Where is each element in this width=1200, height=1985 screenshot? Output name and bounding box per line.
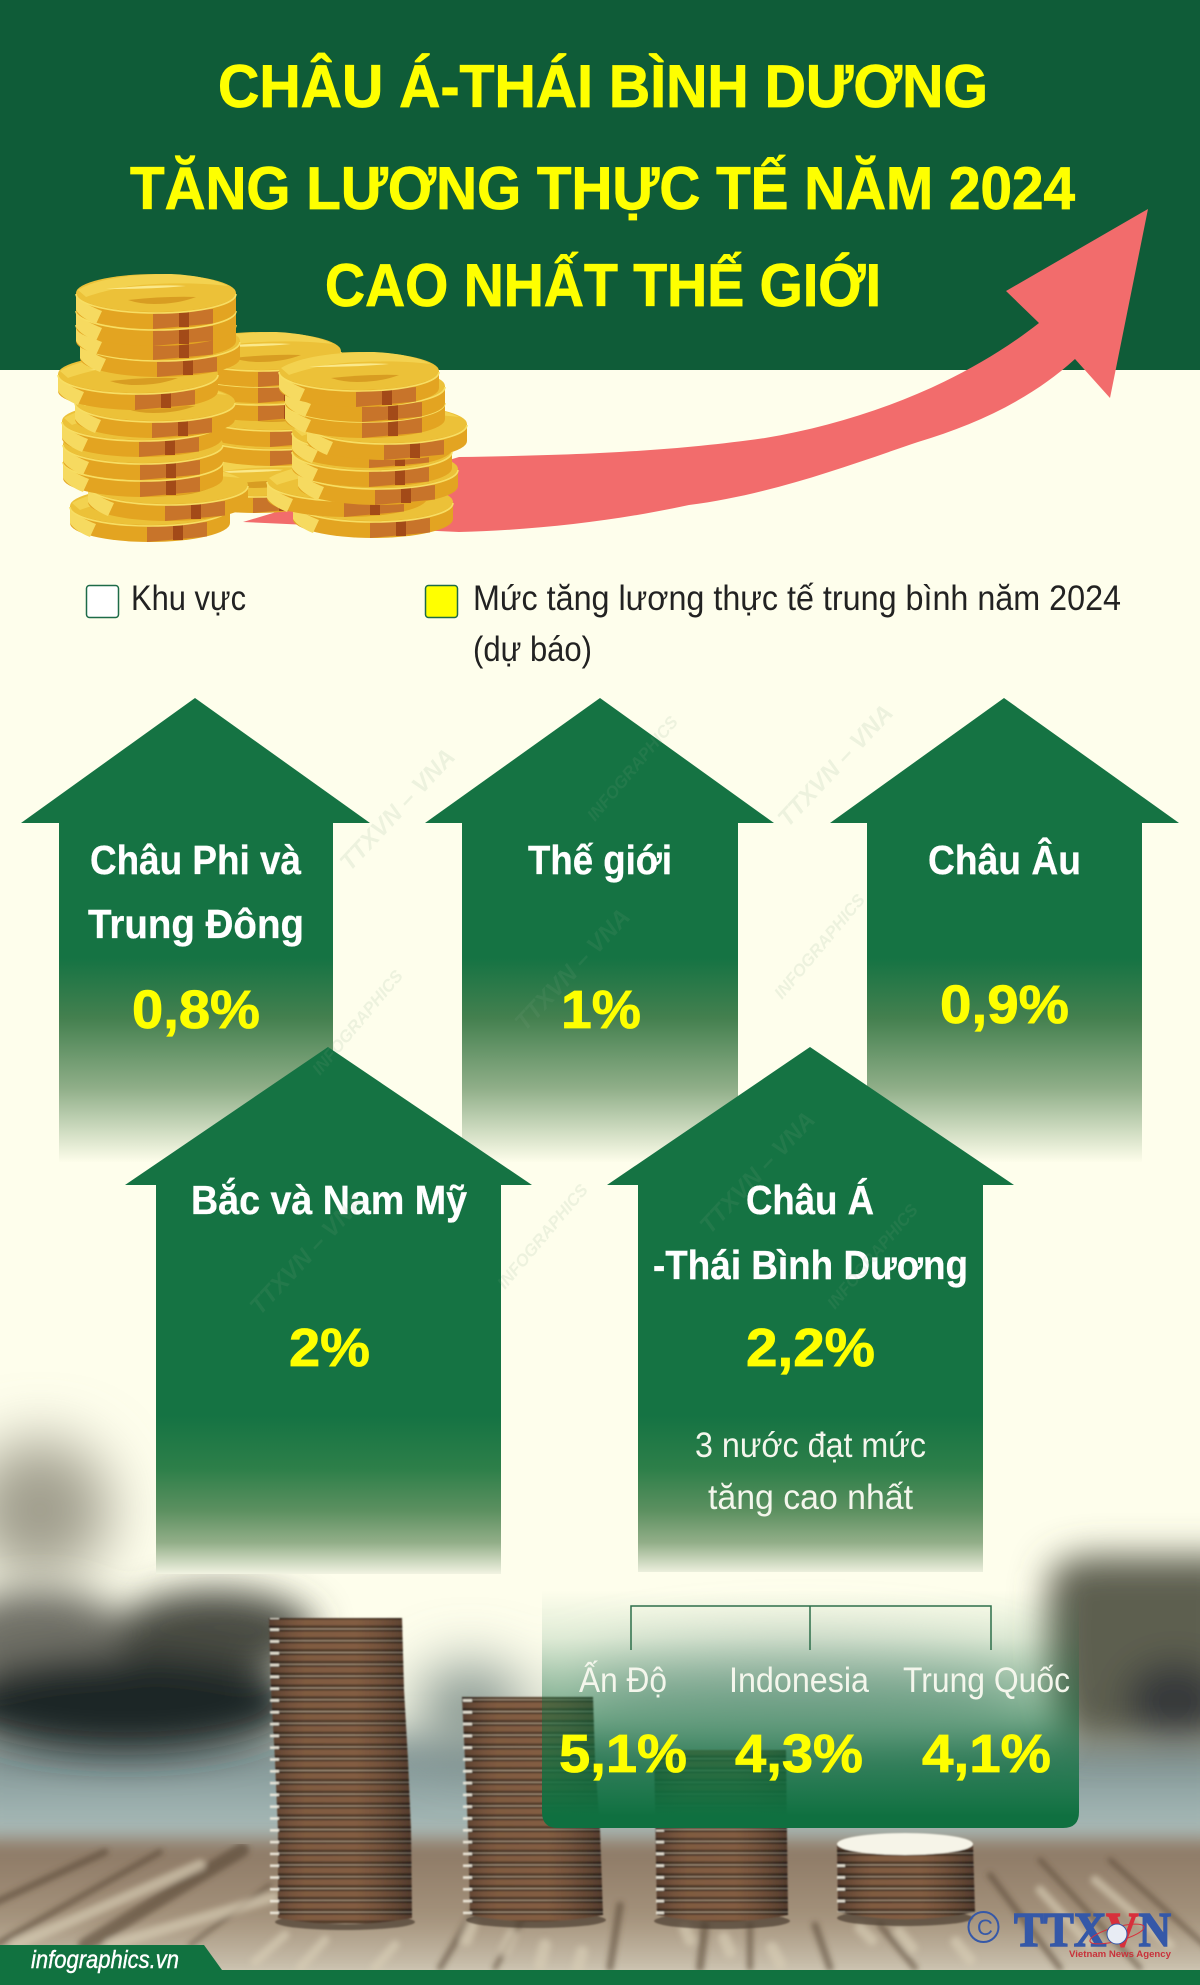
watermarks: TTXVN – VNA <box>245 1188 371 1320</box>
arrow: Châu Âu: Châu Âu <box>928 837 1081 883</box>
title <box>130 53 1076 319</box>
arrow: Châu Phi và Trung Đông: Trung Đông <box>88 901 304 947</box>
icon: gold coins stack <box>58 274 467 542</box>
country: Trung Quốc: 4,1% <box>922 1724 1051 1784</box>
country: Indonesia <box>729 1661 869 1784</box>
watermarks: INFOGRAPHICS <box>309 966 407 1079</box>
legend: Khu vực <box>131 579 246 618</box>
country: Ấn Độ: 5,1% <box>559 1724 687 1784</box>
arrow: Châu Á - Thái Bình Dương: -Thái Bình Dương <box>653 1242 968 1288</box>
watermarks: INFOGRAPHICS <box>771 890 869 1003</box>
watermarks: TTXVN – VNA <box>335 744 461 876</box>
background photo: blurred coin stacks on wooden table <box>0 1440 1200 1983</box>
arrow: Châu Á - Thái Bình Dương: 2,2% <box>746 1318 875 1378</box>
title: TĂNG LƯƠNG THỰC TẾ NĂM 2024 <box>130 155 1076 222</box>
footer bar with source tag <box>0 1945 1200 1985</box>
photo coin stack 2 <box>462 1697 606 1928</box>
arrow: Thế giới <box>425 698 774 1162</box>
header band <box>0 0 1200 370</box>
country: Ấn Độ: Ấn Độ <box>579 1660 667 1700</box>
photo coin stack 1 <box>269 1618 415 1930</box>
photo coin stack 3 <box>654 1750 790 1929</box>
legend: (dự báo) <box>473 630 592 669</box>
watermarks: INFOGRAPHICS <box>824 1200 922 1313</box>
arrow: Bắc và Nam Mỹ: 2% <box>289 1318 370 1378</box>
logo: TTXVN Vietnam News Agency: C <box>977 1915 993 1940</box>
country: Trung Quốc <box>903 1661 1070 1784</box>
arrow: Bắc và Nam Mỹ <box>125 1047 532 1574</box>
watermarks: TTXVN – VNA <box>773 700 899 832</box>
arrow: Châu Á - Thái Bình Dương: tăng cao nhất <box>708 1478 913 1517</box>
arrow: Bắc và Nam Mỹ: Bắc và Nam Mỹ <box>191 1177 467 1223</box>
watermarks <box>245 700 922 1320</box>
arrow: Thế giới: 1% <box>561 980 641 1040</box>
watermarks: INFOGRAPHICS <box>584 712 682 825</box>
arrow: Thế giới: Thế giới <box>528 837 672 883</box>
logo: TTXVN Vietnam News Agency: Vietnam News Agency <box>1069 1949 1172 1960</box>
legend: Mức tăng lương thực tế trung bình năm 2024 <box>473 579 1121 618</box>
arrow: Châu Á - Thái Bình Dương <box>607 1047 1014 1572</box>
arrow: Châu Phi và Trung Đông <box>21 698 370 1162</box>
arrow: Châu Âu <box>830 698 1179 1162</box>
title: CHÂU Á-THÁI BÌNH DƯƠNG <box>218 53 988 120</box>
footer bar with source tag: infographics.vn <box>31 1946 179 1974</box>
bracket connector <box>631 1606 991 1650</box>
arrow: Châu Âu: 0,9% <box>940 975 1069 1035</box>
logo: TTXVN Vietnam News Agency: TTXVN <box>1014 1902 1171 1957</box>
title: CAO NHẤT THẾ GIỚI <box>325 252 881 319</box>
country: Indonesia: Indonesia <box>729 1661 869 1700</box>
legend <box>86 579 1121 669</box>
watermarks: TTXVN – VNA <box>510 904 636 1036</box>
panel: top three countries <box>542 1590 1079 1828</box>
arrow: Châu Phi và Trung Đông: 0,8% <box>132 980 260 1040</box>
arrow: Châu Á - Thái Bình Dương: 3 nước đạt mức <box>695 1426 926 1465</box>
country: Indonesia: 4,3% <box>735 1724 863 1784</box>
photo coin stack 4 <box>837 1833 975 1926</box>
country: Trung Quốc: Trung Quốc <box>903 1661 1070 1700</box>
watermarks: TTXVN – VNA <box>695 1107 821 1239</box>
arrow: Châu Phi và Trung Đông: Châu Phi và <box>90 837 301 883</box>
country: Ấn Độ <box>559 1660 687 1784</box>
arrow: Châu Á - Thái Bình Dương: Châu Á <box>746 1177 874 1223</box>
icon: red rising arrow <box>243 209 1148 532</box>
watermarks: INFOGRAPHICS <box>494 1180 592 1293</box>
